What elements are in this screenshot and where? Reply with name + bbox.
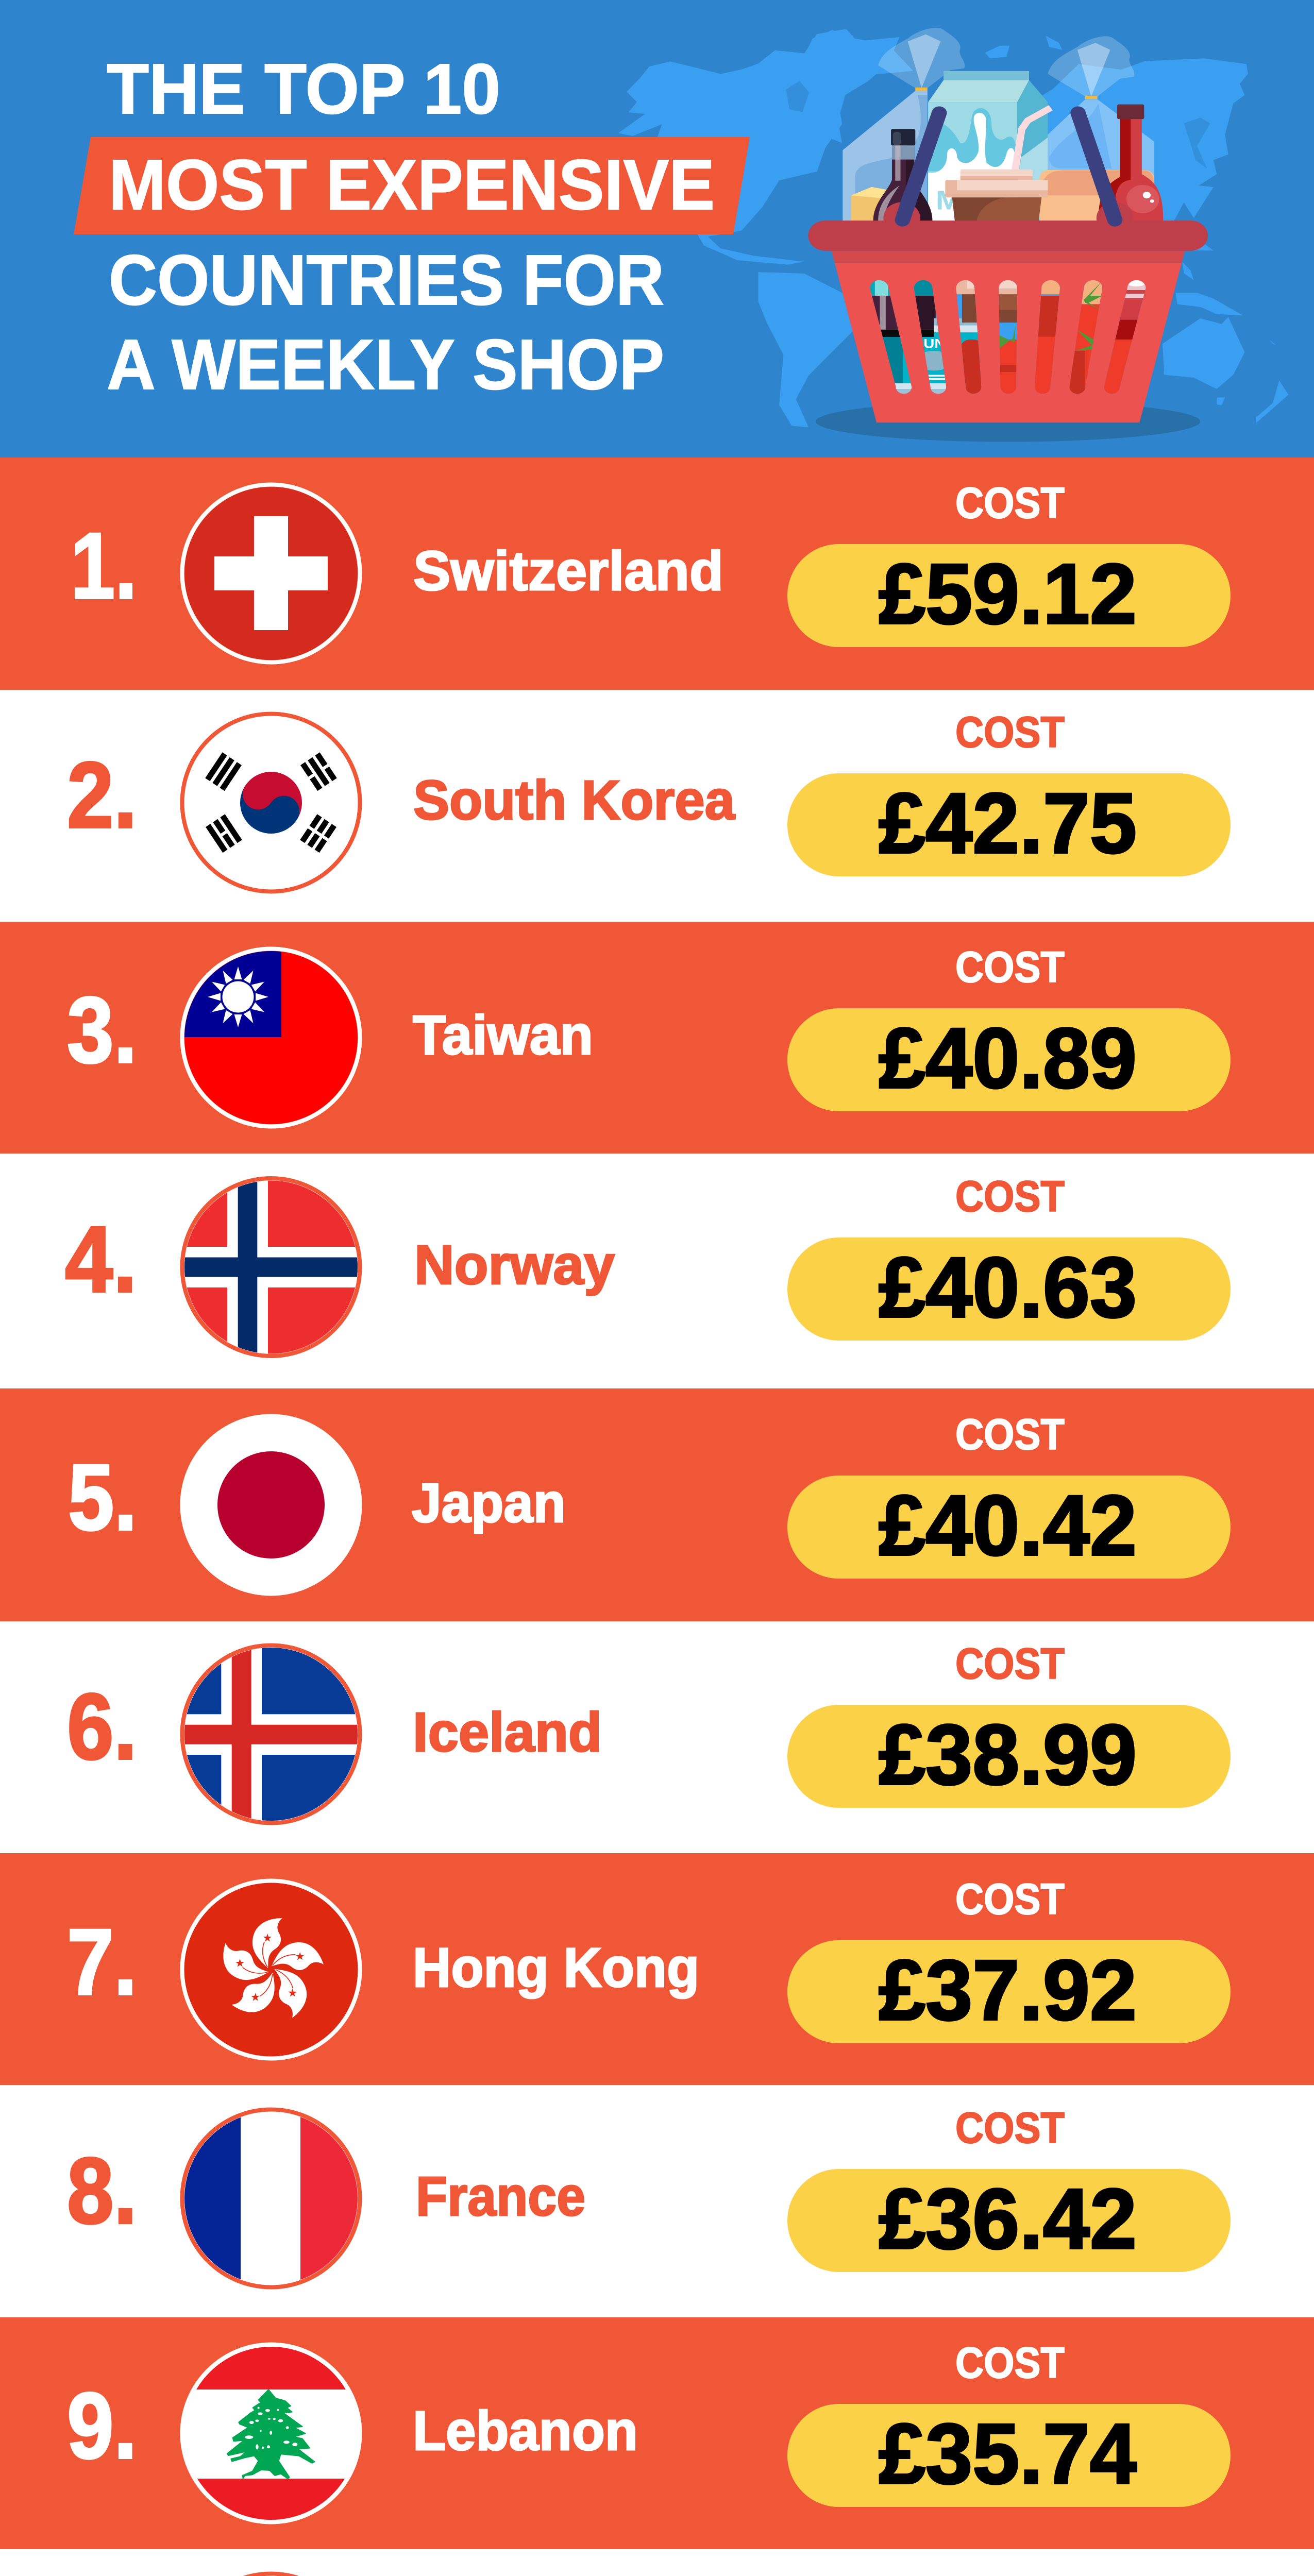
header panel background bbox=[0, 0, 1314, 457]
basket handle bases bbox=[883, 202, 1133, 234]
row 5: Japan bbox=[0, 1388, 1314, 1621]
price pill bbox=[787, 1476, 1231, 1579]
country name: Hong Kong bbox=[413, 1936, 699, 1998]
flag: Japan bbox=[180, 1414, 362, 1596]
row 4: Norway bbox=[65, 1176, 1231, 1358]
rank: 8. bbox=[67, 2138, 137, 2243]
rank: 5. bbox=[68, 1445, 137, 1550]
title: A WEEKLY SHOP bbox=[107, 325, 664, 404]
cost label: COST bbox=[955, 1410, 1065, 1459]
flag: Lebanon bbox=[180, 2342, 362, 2524]
row 10: Denmark bbox=[0, 2549, 1314, 2576]
country name: France bbox=[416, 2165, 585, 2227]
price: £38.99 bbox=[879, 1707, 1137, 1803]
cheese bbox=[851, 187, 895, 221]
milk carton: M bbox=[936, 185, 962, 215]
flag: Switzerland bbox=[182, 484, 360, 663]
drinking straw bbox=[1015, 108, 1051, 170]
price pill bbox=[787, 773, 1231, 876]
basket handles bbox=[902, 113, 1115, 220]
price pill bbox=[787, 1705, 1231, 1808]
price: £42.75 bbox=[879, 776, 1137, 871]
wine bottle bbox=[873, 129, 932, 221]
price: £36.42 bbox=[879, 2172, 1137, 2267]
left bread bag bbox=[843, 28, 965, 221]
rank: 2. bbox=[67, 742, 137, 848]
groceries seen through basket slots bbox=[865, 279, 1151, 395]
country name: Lebanon bbox=[413, 2399, 638, 2462]
right bread bag bbox=[1048, 36, 1154, 221]
cost label: COST bbox=[955, 943, 1065, 991]
rank: 4. bbox=[65, 1207, 137, 1312]
price: £35.74 bbox=[879, 2406, 1137, 2502]
cost label: COST bbox=[955, 1639, 1065, 1688]
country name: Taiwan bbox=[413, 1004, 593, 1066]
price: £40.89 bbox=[879, 1011, 1137, 1106]
cedar tree bbox=[227, 2389, 315, 2479]
flag: France bbox=[182, 2109, 360, 2287]
shopping basket illustration bbox=[808, 28, 1208, 442]
price: £37.92 bbox=[879, 1943, 1137, 2038]
price pill bbox=[787, 2169, 1231, 2272]
country name: South Korea bbox=[413, 769, 735, 831]
row 1: Switzerland bbox=[0, 457, 1314, 690]
cost label: COST bbox=[955, 479, 1065, 527]
rank: 3. bbox=[67, 977, 137, 1082]
flag: Iceland bbox=[182, 1646, 360, 1823]
price pill bbox=[787, 1238, 1231, 1341]
country name: Iceland bbox=[413, 1701, 602, 1763]
flag: Hong Kong bbox=[182, 1880, 360, 2059]
rank: 6. bbox=[67, 1674, 137, 1779]
cost label: COST bbox=[955, 708, 1065, 756]
flag: South Korea bbox=[182, 714, 360, 891]
milk carton bbox=[928, 71, 1048, 221]
price pill bbox=[787, 2404, 1231, 2507]
bread loaf bbox=[1039, 170, 1154, 227]
cost label: COST bbox=[955, 2104, 1065, 2152]
price: £40.42 bbox=[879, 1478, 1137, 1573]
title: COUNTRIES FOR bbox=[109, 241, 664, 320]
world map west bbox=[618, 29, 913, 427]
price pill bbox=[787, 1940, 1231, 2043]
row 7: Hong Kong bbox=[0, 1853, 1314, 2085]
row 6: Iceland bbox=[69, 1643, 1231, 1825]
row 9: Lebanon bbox=[0, 2317, 1314, 2549]
cost label: COST bbox=[955, 2338, 1065, 2387]
row 3: Taiwan bbox=[0, 922, 1314, 1154]
row 8: France bbox=[0, 2085, 1314, 2317]
sauce bottle bbox=[1099, 105, 1163, 221]
price: £59.12 bbox=[879, 547, 1137, 642]
price pill bbox=[787, 1008, 1231, 1111]
rank: 7. bbox=[67, 1909, 137, 2014]
coffee cup bbox=[945, 170, 1048, 221]
country name: Switzerland bbox=[413, 539, 723, 602]
country name: Norway bbox=[414, 1233, 615, 1296]
rank: 1. bbox=[71, 513, 137, 618]
rank: 9. bbox=[67, 2373, 137, 2478]
title orange banner bbox=[74, 137, 750, 234]
title: MOST EXPENSIVE bbox=[109, 145, 715, 225]
groceries seen through basket slots: UN bbox=[923, 336, 946, 351]
basket body bbox=[835, 263, 1182, 422]
title: THE TOP 10 bbox=[107, 49, 500, 129]
cost label: COST bbox=[955, 1875, 1065, 1923]
row 2: South Korea bbox=[0, 690, 1314, 922]
price: £40.63 bbox=[879, 1240, 1137, 1335]
country name: Japan bbox=[412, 1471, 566, 1534]
flag: Denmark bbox=[182, 2574, 360, 2576]
flag: Norway bbox=[182, 1178, 360, 1356]
cost label: COST bbox=[955, 1172, 1065, 1221]
flag: Taiwan bbox=[182, 949, 360, 1126]
handle fronts bbox=[902, 194, 1115, 220]
title bbox=[107, 49, 715, 404]
price pill bbox=[787, 544, 1231, 647]
world map east bbox=[786, 30, 1288, 423]
